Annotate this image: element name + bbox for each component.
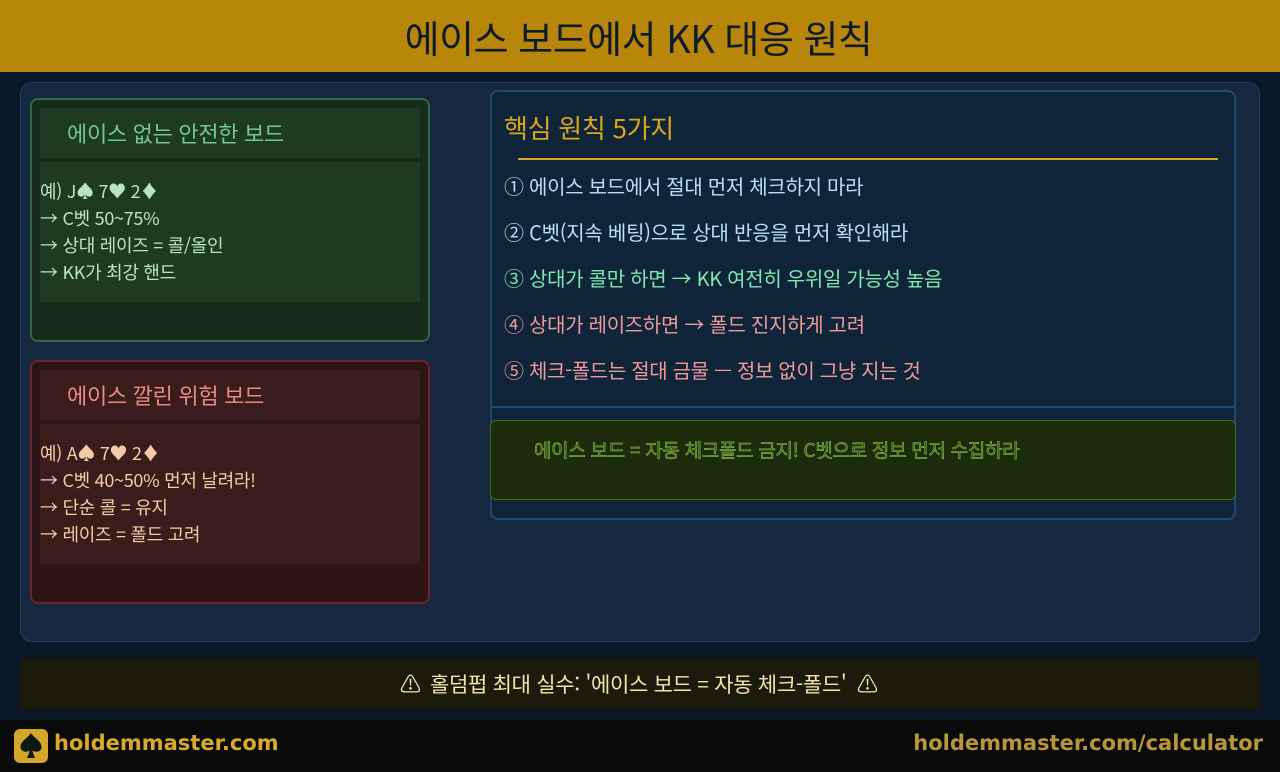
text block: safe board details: → 상대 레이즈 = 콜/올인 xyxy=(40,232,223,258)
text block: safe board details: → C벳 50~75% xyxy=(40,205,159,231)
principle 4: ④ 상대가 레이즈하면 → 폴드 진지하게 고려 xyxy=(504,309,865,338)
brand name: holdemmaster.com xyxy=(54,731,279,755)
text block: danger board details: → C벳 40~50% 먼저 날려라! xyxy=(40,467,256,493)
heading: danger board: 에이스 깔린 위험 보드 xyxy=(67,379,264,411)
text block: danger board details: 예) A♠ 7♥ 2♦ xyxy=(40,440,159,466)
warning icon right: ⚠ xyxy=(857,669,878,699)
text block: safe board details: 예) J♠ 7♥ 2♦ xyxy=(40,178,158,204)
panel: safe board xyxy=(30,98,430,342)
calculator url: holdemmaster.com/calculator xyxy=(913,731,1263,755)
main panel xyxy=(20,82,1260,642)
text block: danger board details: → 레이즈 = 폴드 고려 xyxy=(40,521,200,547)
heading: danger board xyxy=(40,370,420,420)
principle 5: ⑤ 체크-폴드는 절대 금물 — 정보 없이 그냥 지는 것 xyxy=(504,355,921,384)
heading underline xyxy=(518,158,1218,160)
text block: danger board details: → 단순 콜 = 유지 xyxy=(40,494,168,520)
title: 에이스 보드에서 KK 대응 원칙 xyxy=(405,9,872,64)
heading: safe board: 에이스 없는 안전한 보드 xyxy=(67,117,284,149)
callout: key takeaway xyxy=(490,420,1236,500)
icon: spade logo xyxy=(14,729,48,763)
text block: danger board details xyxy=(40,424,420,564)
heading: safe board xyxy=(40,108,420,158)
divider line xyxy=(492,406,1234,408)
principle 3: ③ 상대가 콜만 하면 → KK 여전히 우위일 가능성 높음 xyxy=(504,263,942,292)
panel: five key principles xyxy=(490,90,1236,520)
warning banner xyxy=(20,658,1260,710)
heading: five principles: 핵심 원칙 5가지 xyxy=(504,109,674,146)
principle 1: ① 에이스 보드에서 절대 먼저 체크하지 마라 xyxy=(504,171,863,200)
footer bar xyxy=(0,720,1280,772)
callout: key takeaway: 에이스 보드 = 자동 체크폴드 금지! C벳으로 정보 먼저 수집하라 xyxy=(534,436,1019,463)
text block: safe board details: → KK가 최강 핸드 xyxy=(40,259,176,285)
title banner xyxy=(0,0,1280,72)
panel: danger board xyxy=(30,360,430,604)
warning text: 홀덤펍 최대 실수: '에이스 보드 = 자동 체크-폴드' xyxy=(430,669,846,699)
text block: safe board details xyxy=(40,162,420,302)
principle 2: ② C벳(지속 베팅)으로 상대 반응을 먼저 확인해라 xyxy=(504,217,908,246)
warning icon left: ⚠ xyxy=(400,669,421,699)
